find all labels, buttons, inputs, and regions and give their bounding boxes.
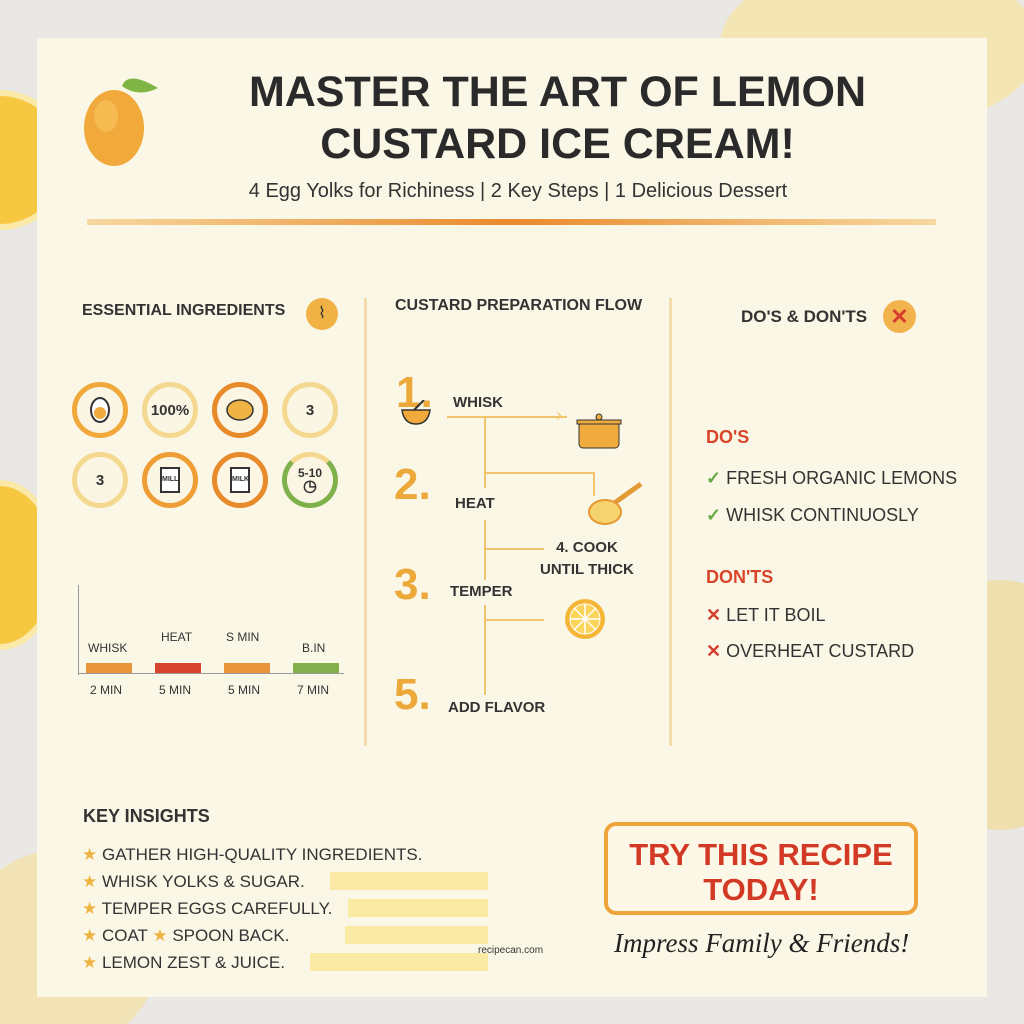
panel: ingredients xyxy=(72,298,344,697)
icon: x badge: ✕ xyxy=(890,304,909,329)
panel: dos and donts: DON'TS xyxy=(706,567,773,587)
bar chart: step times: S MIN xyxy=(226,630,259,644)
ingredient rings: 3 xyxy=(306,402,314,418)
icon: bowl xyxy=(401,400,431,425)
panel: key insights: ★ WHISK YOLKS & SUGAR. xyxy=(82,872,305,891)
icon: whisk badge xyxy=(306,298,338,330)
panel: dos and donts: ✓ WHISK CONTINUOSLY xyxy=(706,505,919,525)
ingredient rings: 5-10 xyxy=(298,466,322,480)
panel: dos and donts: ✕ OVERHEAT CUSTARD xyxy=(706,641,914,661)
panel: custard flow: 2. xyxy=(394,460,431,509)
button: try this recipe xyxy=(604,822,918,915)
button: try this recipe: TRY THIS RECIPE xyxy=(629,837,893,872)
button: try this recipe: TODAY! xyxy=(703,872,819,907)
panel: key insights: ★ LEMON ZEST & JUICE. xyxy=(82,953,285,972)
heading: key insights: KEY INSIGHTS xyxy=(83,806,210,826)
bar chart: step times: 5 MIN xyxy=(228,683,260,697)
ingredient rings: MILK xyxy=(232,476,249,483)
bar chart: step times: WHISK xyxy=(88,641,127,655)
arrows xyxy=(447,416,567,418)
icon: lemon slice xyxy=(565,599,605,639)
panel: custard flow: 4. COOK xyxy=(556,539,618,556)
bar chart: step times: 2 MIN xyxy=(90,683,122,697)
heading: do's & don'ts: DO'S & DON'TS xyxy=(741,307,867,326)
panel: key insights: ★ GATHER HIGH-QUALITY INGREDIENTS. xyxy=(82,845,422,864)
panel: dos and donts: ✓ FRESH ORGANIC LEMONS xyxy=(706,468,957,488)
panel: custard flow: ADD FLAVOR xyxy=(448,699,545,716)
watermark: recipecan.com xyxy=(478,945,543,956)
panel: custard flow: 3. xyxy=(394,560,431,609)
title: MASTER THE ART OF LEMON xyxy=(249,68,866,116)
tagline: Impress Family & Friends! xyxy=(614,928,909,958)
panel: custard flow: HEAT xyxy=(455,495,495,512)
heading: custard preparation flow: CUSTARD PREPARATION FLOW xyxy=(395,297,642,314)
panel: key insights: ★ TEMPER EGGS CAREFULLY. xyxy=(82,899,332,918)
icon: pot xyxy=(576,414,622,448)
ingredient rings: 100% xyxy=(151,402,189,418)
panel: key insights: ★ COAT ★ SPOON BACK. xyxy=(82,926,289,945)
heading: essential ingredients: ESSENTIAL INGREDIENTS xyxy=(82,302,285,319)
panel: dos and donts xyxy=(706,300,957,661)
icon: lemon xyxy=(84,78,158,166)
panel: dos and donts: DO'S xyxy=(706,427,749,447)
panel: custard flow xyxy=(394,297,642,719)
title xyxy=(249,68,866,168)
ingredient rings: MILL xyxy=(162,476,178,483)
ingredient rings xyxy=(72,382,338,508)
bar chart: step times: 7 MIN xyxy=(297,683,329,697)
icon: spoon xyxy=(588,482,642,525)
bar chart: step times xyxy=(78,585,344,697)
ingredient rings: 3 xyxy=(96,472,104,488)
panel: custard flow: 5. xyxy=(394,670,431,719)
panel: custard flow: 1. xyxy=(396,368,433,417)
bar chart: step times: B.IN xyxy=(302,641,325,655)
icon: x badge xyxy=(883,300,916,333)
panel: custard flow: UNTIL THICK xyxy=(540,561,634,578)
subtitle: 4 Egg Yolks for Richiness | 2 Key Steps | 1 Delicious Dessert xyxy=(249,180,787,202)
bar chart: step times: HEAT xyxy=(161,630,192,644)
panel: custard flow: WHISK xyxy=(453,394,503,411)
title: CUSTARD ICE CREAM! xyxy=(320,120,795,168)
ingredient rings: ◷ xyxy=(303,478,317,495)
panel: key insights xyxy=(82,806,488,972)
panel: dos and donts: ✕ LET IT BOIL xyxy=(706,605,825,625)
icon: whisk badge: ⌇ xyxy=(318,305,326,322)
bar chart: step times: 5 MIN xyxy=(159,683,191,697)
divider line xyxy=(87,219,936,225)
panel: custard flow: TEMPER xyxy=(450,583,513,600)
panel: custard flow: › xyxy=(556,405,562,425)
